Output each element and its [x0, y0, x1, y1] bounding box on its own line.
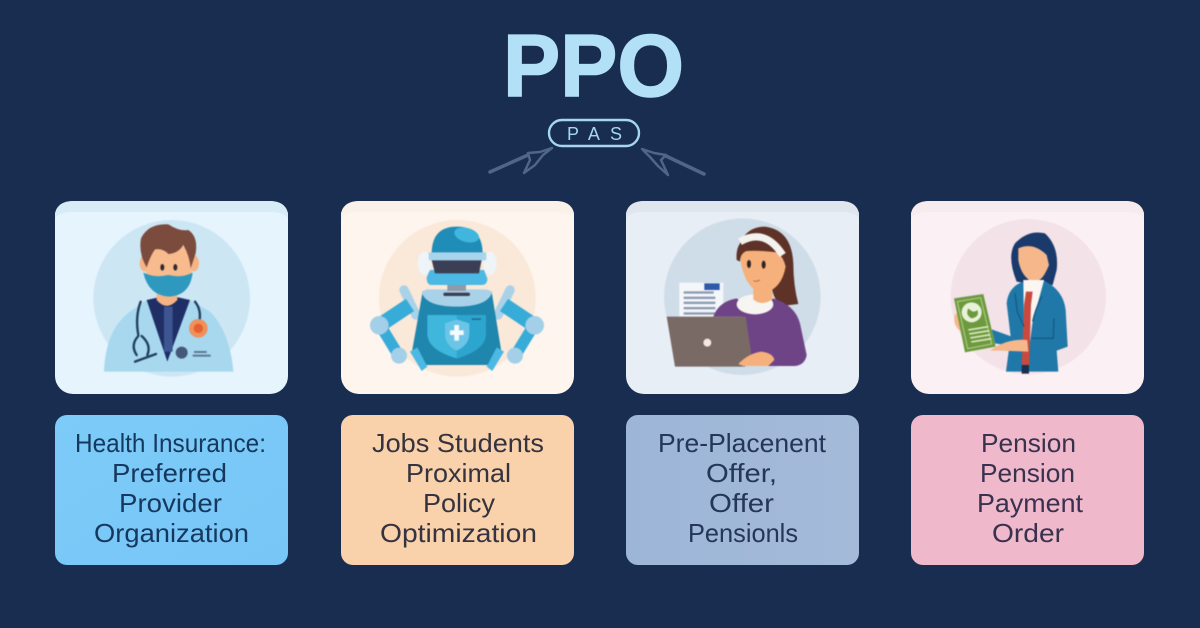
- label: health insurance: Organization: [94, 518, 249, 548]
- panel: health insurance image card: [55, 201, 288, 394]
- icon: robot: [370, 220, 544, 377]
- badge: PAS: PAS: [567, 124, 622, 144]
- panel: pension image card: [911, 201, 1144, 394]
- label: pre-placement offer: [626, 415, 859, 565]
- label: jobs students: Policy: [423, 488, 495, 518]
- label: health insurance: Provider: [119, 488, 222, 518]
- label: jobs students: [341, 415, 574, 565]
- label: pre-placement offer: Pensionls: [688, 518, 798, 548]
- label: pension payment order: [911, 415, 1144, 565]
- label: pension payment order: Pension: [981, 428, 1076, 458]
- label: pension payment order: Payment: [977, 488, 1084, 518]
- arrow: left: [490, 148, 552, 173]
- panel: robot image card: [341, 201, 574, 394]
- label: pre-placement offer: Offer: [709, 488, 774, 518]
- icon: woman with laptop: [664, 218, 821, 375]
- badge: PAS: [549, 120, 639, 146]
- label: jobs students: Optimization: [380, 518, 537, 548]
- icon: woman with pension document: [951, 219, 1106, 374]
- title: PPO: [503, 16, 684, 115]
- label: health insurance: Preferred: [112, 458, 227, 488]
- label: pre-placement offer: Pre-Placenent: [658, 428, 827, 458]
- label: health insurance: Health Insurance:: [75, 428, 266, 458]
- label: jobs students: Jobs Students: [372, 428, 544, 458]
- label: health insurance: [55, 415, 288, 565]
- label: pre-placement offer: Offer,: [706, 458, 777, 488]
- label: jobs students: Proximal: [406, 458, 511, 488]
- arrow: right: [642, 149, 704, 175]
- panel: pre-placement image card: [626, 201, 859, 394]
- label: pension payment order: Order: [992, 518, 1064, 548]
- label: pension payment order: Pension: [980, 458, 1075, 488]
- icon: doctor: [93, 220, 250, 377]
